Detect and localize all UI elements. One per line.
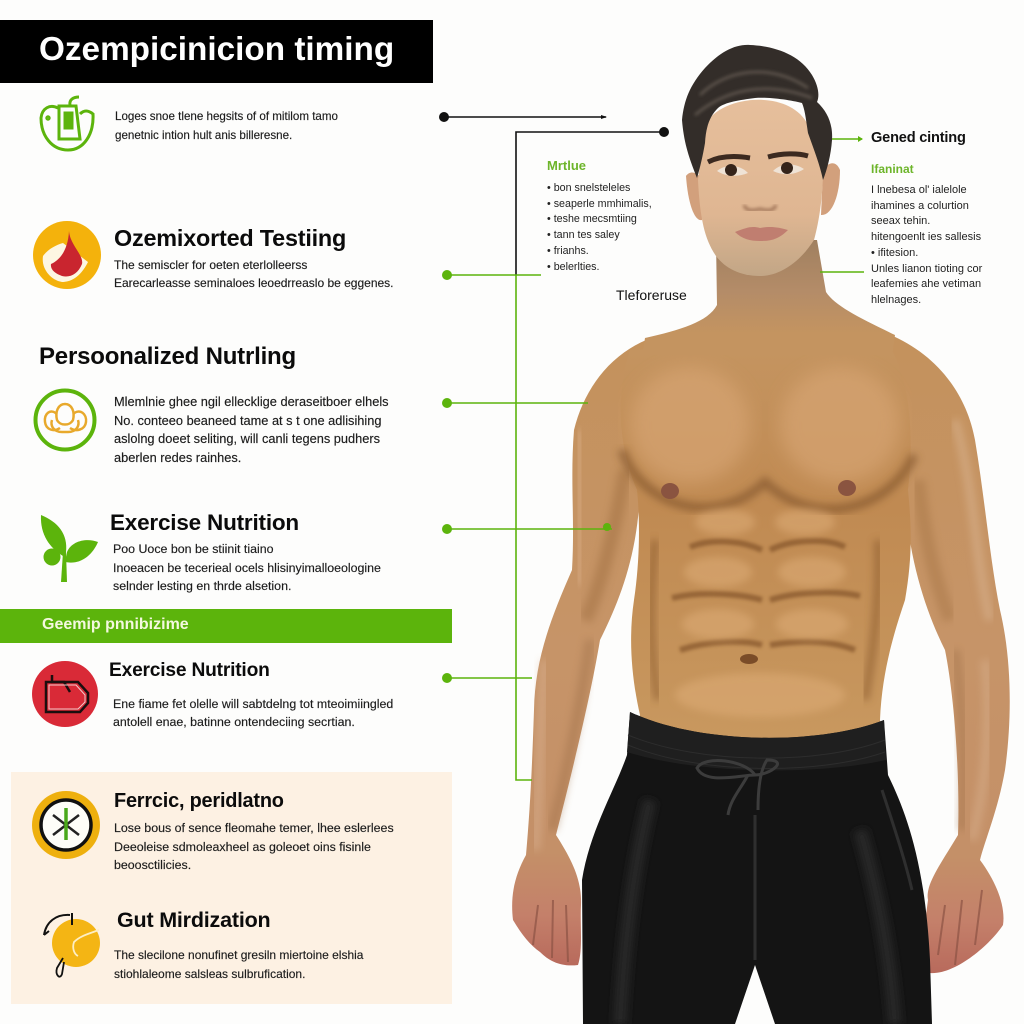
nose bbox=[744, 205, 776, 210]
text block: exercise nutrition 2 bbox=[113, 697, 393, 729]
text block: right column: • ifitesion. bbox=[871, 247, 918, 259]
text block: exercise nutrition: Poo Uoce bon be stiinit tiaino bbox=[113, 542, 274, 556]
chest highlights bbox=[630, 367, 750, 483]
text block: exercise nutrition: selnder lesting en thrde alsetion. bbox=[113, 579, 291, 593]
text block: testing: Earecarleasse seminaloes leoedrreaslo be eggenes. bbox=[114, 276, 394, 290]
heading: exercise nutrition 2: Exercise Nutrition bbox=[109, 660, 270, 681]
text block: mid column list: • belerlties. bbox=[547, 261, 599, 273]
text block: intro: Loges snoe tlene hegsits of of mitilom tamo bbox=[115, 110, 338, 123]
text block: exercise nutrition: Inoeacen be tecerieal ocels hlisinyimalloeologine bbox=[113, 560, 381, 574]
text block: right column: seeax tehin. bbox=[871, 215, 930, 227]
text block: personalized: aslolng doeet seliting, will canli tegens pudhers bbox=[114, 431, 380, 446]
icon: green leaves bbox=[41, 515, 98, 582]
text block: mid column list: • teshe mecsmtiing bbox=[547, 213, 637, 225]
text block: exercise nutrition 2: antolell enae, batinne ontendeciing secrtian. bbox=[113, 715, 355, 729]
text block: intro bbox=[115, 110, 338, 142]
text block: right column: leafemies ahe vetiman bbox=[871, 278, 981, 290]
abs bbox=[672, 541, 860, 650]
label: right column heading: Ifaninat bbox=[871, 162, 914, 176]
text block: gut bbox=[114, 948, 364, 980]
text block: right column: Unles lianon tioting cor bbox=[871, 263, 982, 275]
right arm bbox=[860, 325, 1010, 973]
text block: ferric: beoosctilicies. bbox=[114, 858, 191, 872]
heading: exercise nutrition: Exercise Nutrition bbox=[110, 510, 299, 535]
eyes and brows bbox=[708, 154, 808, 176]
text block: testing: The semiscler for oeten eterlolleerss bbox=[114, 258, 307, 272]
text block: mid column list bbox=[547, 182, 652, 273]
text block: gut: The slecilone nonufinet gresiln miertoine elshia bbox=[114, 948, 363, 962]
text block: personalized: Mlemlnie ghee ngil ellecklige deraseitboer elhels bbox=[114, 394, 389, 409]
title banner: Ozempicinicion timing bbox=[39, 31, 394, 68]
label: gened cinting: Gened cinting bbox=[871, 130, 966, 146]
text block: exercise nutrition bbox=[113, 542, 381, 593]
mouth bbox=[735, 227, 788, 241]
text block: right column: ihamines a colurtion bbox=[871, 200, 969, 212]
pectoral crease bbox=[622, 450, 914, 509]
head bbox=[682, 45, 840, 276]
green banner bbox=[0, 609, 452, 643]
pants bbox=[582, 712, 932, 1024]
text block: mid column list: • seaperle mmhimalis, bbox=[547, 198, 652, 210]
icon: red circle device bbox=[32, 661, 98, 727]
heading: personalized: Persoonalized Nutrling bbox=[39, 343, 296, 370]
text block: right column: hlelnages. bbox=[871, 294, 921, 306]
icon: pepper outline bbox=[41, 97, 93, 150]
icon: red drop on yellow circle bbox=[33, 221, 101, 289]
nipples bbox=[661, 480, 856, 499]
label: mid column heading: Mrtlue bbox=[547, 158, 586, 173]
label: reference: Tleforeruse bbox=[616, 287, 687, 303]
hair bbox=[682, 45, 832, 180]
icon: yellow fruit bbox=[44, 913, 100, 977]
panel: bottom beige background bbox=[11, 772, 452, 1004]
green banner: Geemip pnnibizime bbox=[42, 616, 189, 633]
text block: personalized: aberlen redes rainhes. bbox=[114, 450, 241, 464]
text block: ferric: Deeoleise sdmoleaxheel as goleoet oins fisinle bbox=[114, 840, 371, 854]
text block: right column: hitengoenlt ies sallesis bbox=[871, 231, 981, 243]
icon: green circle knot bbox=[36, 390, 94, 450]
icon: yellow circle clock bbox=[32, 791, 100, 859]
text block: exercise nutrition 2: Ene fiame fet olelle will sabtdelng tot mteoimiingled bbox=[113, 697, 393, 711]
torso bbox=[621, 349, 914, 740]
navel bbox=[740, 654, 758, 664]
heading: ferric: Ferrcic, peridlatno bbox=[114, 790, 284, 812]
text block: gut: stiohlaleome salsleas sulbrufication. bbox=[114, 966, 305, 980]
text block: mid column list: • tann tes saley bbox=[547, 229, 620, 241]
heading: gut: Gut Mirdization bbox=[117, 908, 270, 932]
neck and trapezius bbox=[640, 240, 895, 370]
text block: testing bbox=[114, 258, 394, 290]
text block: right column: I lnebesa ol' ialelole bbox=[871, 184, 967, 196]
title banner bbox=[0, 20, 433, 83]
text block: ferric bbox=[114, 821, 394, 872]
text block: personalized bbox=[114, 394, 389, 464]
text block: mid column list: • frianhs. bbox=[547, 245, 589, 257]
text block: intro: genetnic intion hult anis billeresne. bbox=[115, 128, 292, 142]
text block: ferric: Lose bous of sence fleomahe temer, lhee eslerlees bbox=[114, 821, 394, 835]
face bbox=[698, 100, 823, 276]
text block: personalized: No. conteeo beaneed tame at s t one adlisihing bbox=[114, 412, 382, 428]
left arm bbox=[512, 335, 660, 965]
text block: right column bbox=[871, 184, 982, 306]
heading: testing: Ozemixorted Testiing bbox=[114, 225, 346, 251]
text block: mid column list: • bon snelsteleles bbox=[547, 182, 630, 194]
